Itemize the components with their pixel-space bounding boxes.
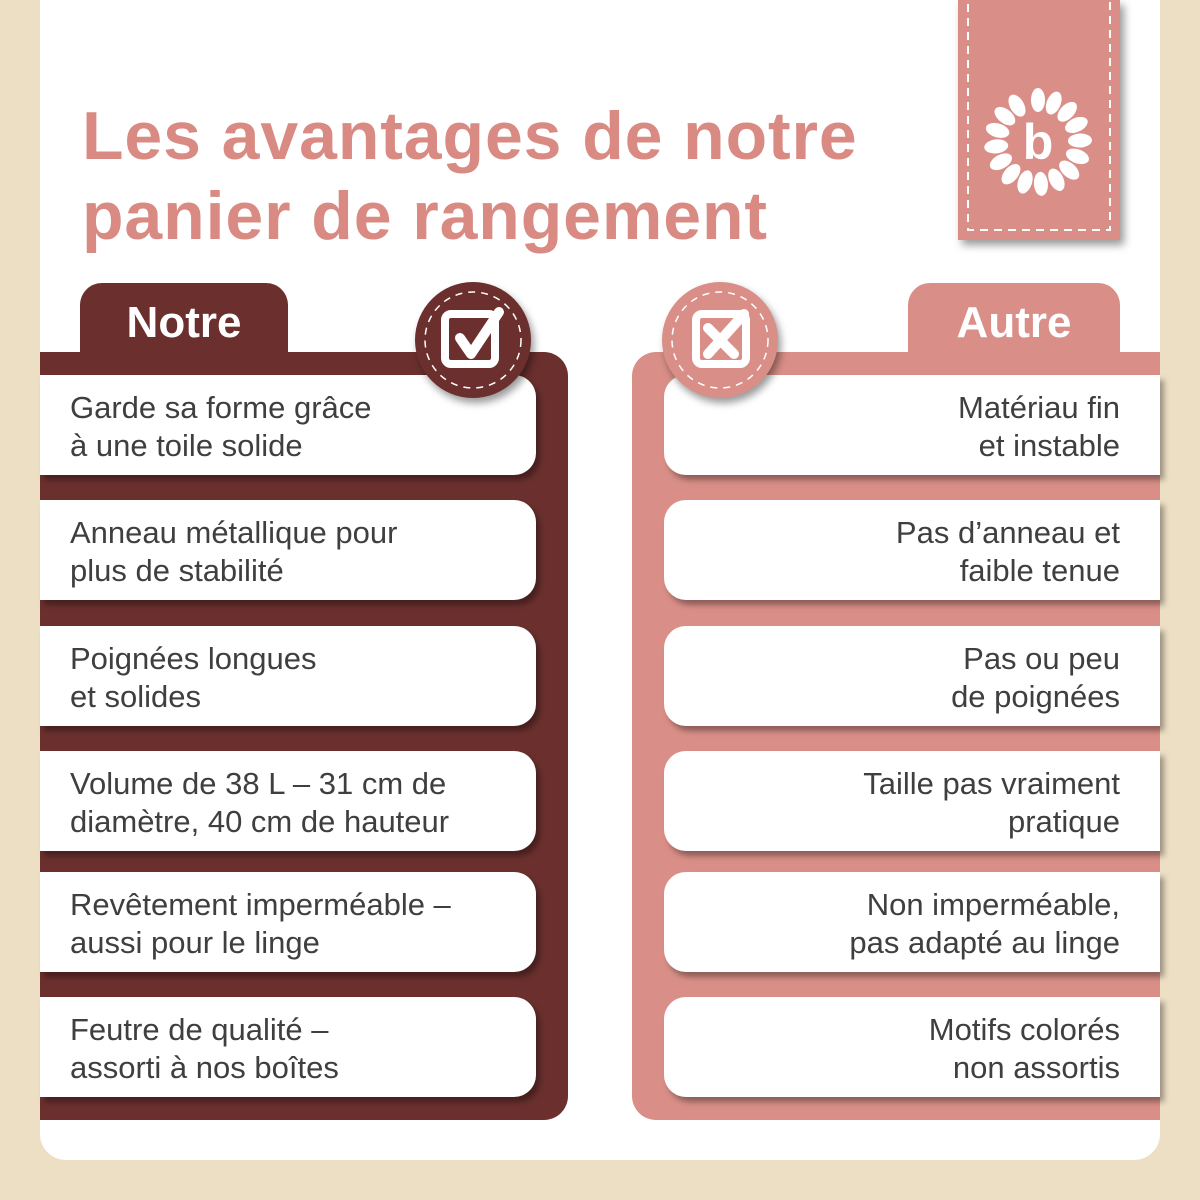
row R4: [664, 751, 1160, 851]
row L2: [40, 500, 536, 600]
title: [82, 98, 858, 254]
tab: Autre: [908, 283, 1120, 363]
row L1: à une toile solide: [70, 428, 303, 463]
title: panier de rangement: [82, 178, 768, 254]
icon: cross: [662, 282, 778, 398]
row L5: Revêtement imperméable –: [70, 887, 451, 922]
row L4: [40, 751, 536, 851]
row R5: Non imperméable,: [867, 887, 1120, 922]
row R4: Taille pas vraiment: [863, 766, 1120, 801]
row R3: [664, 626, 1160, 726]
tab: Notre: Notre: [127, 298, 241, 347]
row R3: Pas ou peu: [963, 641, 1120, 676]
panel: notre: [40, 352, 568, 1120]
row R5: pas adapté au linge: [849, 925, 1120, 960]
row R4: pratique: [1008, 804, 1120, 839]
row L1: Garde sa forme grâce: [70, 390, 372, 425]
row L6: assorti à nos boîtes: [70, 1050, 339, 1085]
row R2: [664, 500, 1160, 600]
row L6: Feutre de qualité –: [70, 1012, 329, 1047]
row R2: Pas d’anneau et: [896, 515, 1120, 550]
logo tag: [958, 0, 1120, 240]
row L5: [40, 872, 536, 972]
row R6: non assortis: [953, 1050, 1120, 1085]
row L1: [40, 375, 536, 475]
row L2: plus de stabilité: [70, 553, 284, 588]
row L6: [40, 997, 536, 1097]
tab: Autre: Autre: [957, 298, 1071, 347]
title: Les avantages de notre: [82, 98, 858, 174]
row L3: [40, 626, 536, 726]
tab: Notre: [80, 283, 288, 363]
row L3: Poignées longues: [70, 641, 316, 676]
row R2: faible tenue: [960, 553, 1120, 588]
row R1: Matériau fin: [958, 390, 1120, 425]
row L4: Volume de 38 L – 31 cm de: [70, 766, 446, 801]
row L5: aussi pour le linge: [70, 925, 320, 960]
row R3: de poignées: [951, 679, 1120, 714]
row R1: [664, 375, 1160, 475]
row R6: Motifs colorés: [929, 1012, 1120, 1047]
row L2: Anneau métallique pour: [70, 515, 397, 550]
icon: check: [415, 282, 531, 398]
row R5: [664, 872, 1160, 972]
row L3: et solides: [70, 679, 201, 714]
logo tag: b: [1023, 114, 1053, 170]
row R6: [664, 997, 1160, 1097]
panel: autre: [632, 352, 1160, 1120]
row R1: et instable: [979, 428, 1120, 463]
row L4: diamètre, 40 cm de hauteur: [70, 804, 449, 839]
